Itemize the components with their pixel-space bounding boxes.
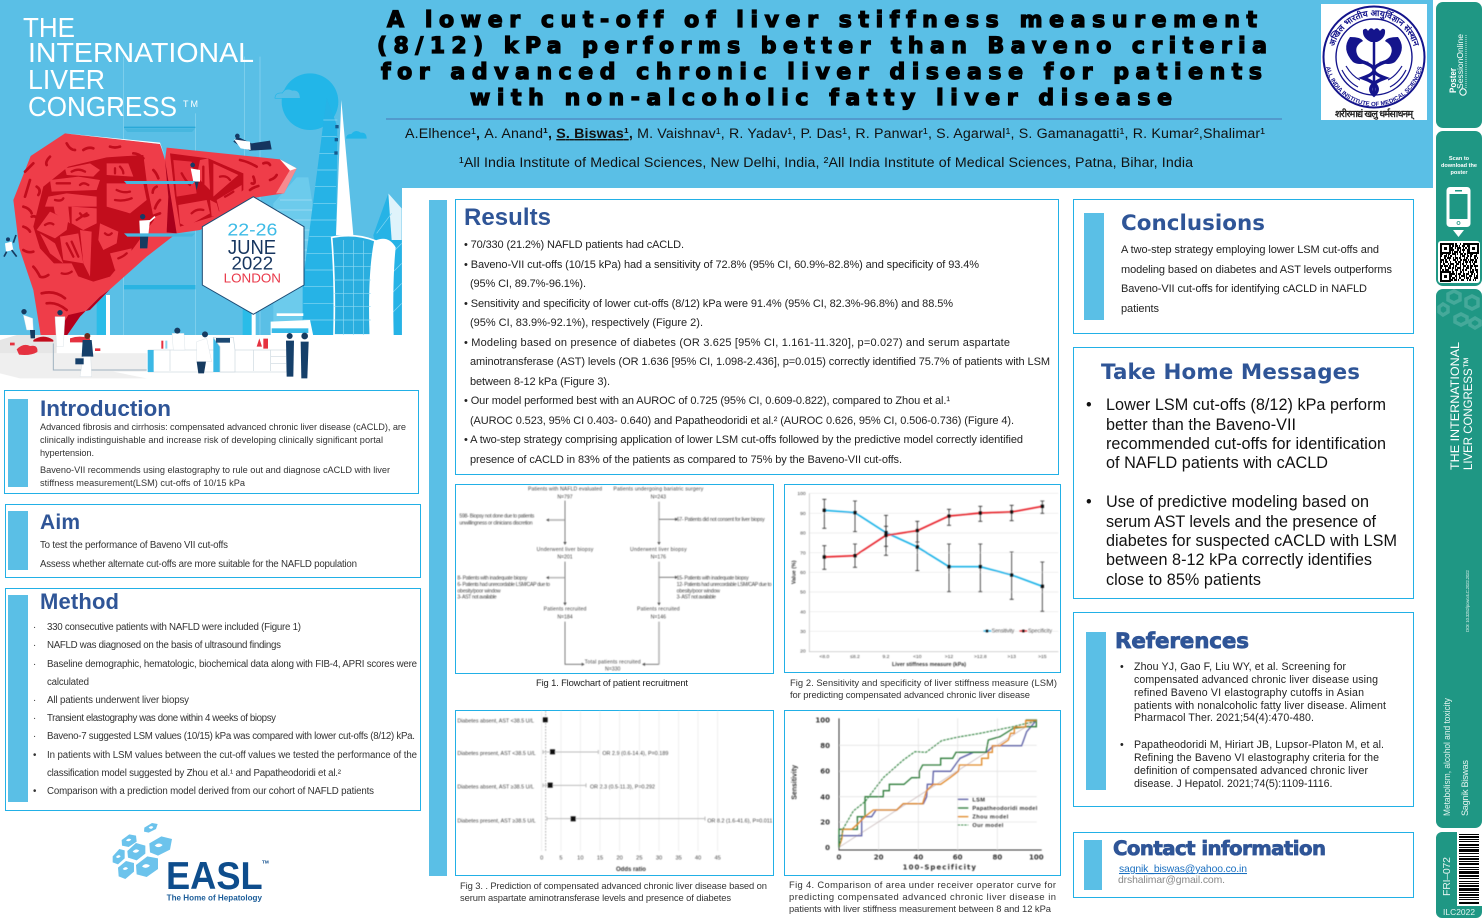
congress code: ILC2022 xyxy=(1443,907,1475,917)
hexagon cluster xyxy=(113,823,172,879)
panel: take home messages xyxy=(1074,348,1414,598)
caption: figure 2: Fig 2. Sensitivity and specificity of liver stiffness measure (LSM) xyxy=(790,677,1057,688)
reference list: definition of compensated advanced chronic liver xyxy=(1134,765,1368,777)
date hexagon: 22-26 xyxy=(227,220,277,240)
reference list: disease. J Hepatol. 2021;74(5):1109-1116. xyxy=(1134,778,1332,790)
line chart: 80 xyxy=(800,531,806,537)
flowchart: N=201 xyxy=(557,555,573,561)
caption: figure 2: for predicting compensated advanced chronic liver disease xyxy=(790,689,1030,700)
accent bar xyxy=(1084,840,1102,890)
forest plot: 10 xyxy=(577,855,583,861)
heading: Results xyxy=(464,204,551,231)
tagline: The Home of Hepatology xyxy=(167,893,262,903)
ROC chart xyxy=(790,717,1044,872)
method list: All patients underwent liver biopsy xyxy=(47,695,189,706)
line chart: 30 xyxy=(800,629,806,635)
date hexagon: JUNE xyxy=(228,236,276,259)
results text: (95% CI, 89.7%-96.1%). xyxy=(470,278,586,290)
date hexagon: 2022 xyxy=(231,252,273,273)
session online logo: Poster xyxy=(1448,68,1458,93)
legend: Sensitivity xyxy=(992,629,1015,635)
forest plot: 5 xyxy=(559,855,563,861)
forest plot: 0 xyxy=(540,855,543,861)
header background xyxy=(0,0,1433,336)
forest plot xyxy=(457,711,772,873)
flowchart: N=184 xyxy=(557,614,573,620)
reference list xyxy=(1120,661,1386,790)
forest plot: 40 xyxy=(695,855,701,861)
results text: • Modeling based on presence of diabetes (OR 3.625 [95% CI, 1.161-11.320], p=0.027) and serum aspartate xyxy=(464,337,1010,349)
panel: figure 4 ROC curve xyxy=(784,710,1060,876)
flowchart: N=243 xyxy=(651,494,666,500)
aim text xyxy=(40,540,357,570)
scientists on liver xyxy=(4,134,272,257)
icon: arrow down xyxy=(1453,230,1464,237)
flowchart: 15- Patients with inadequate biopsy xyxy=(677,576,749,582)
line chart: Value (%) xyxy=(791,560,797,584)
line chart: 40 xyxy=(800,609,806,615)
method list: • xyxy=(33,786,37,797)
heading: Take Home Messages xyxy=(1101,360,1360,385)
flowchart: 3- AST not available xyxy=(457,595,497,601)
presenter: Sagnik Biswas xyxy=(1460,760,1470,816)
line chart: 9.2 xyxy=(883,654,890,660)
accent bar xyxy=(8,511,28,570)
reference list: Papatheodoridi M, Hiriart JB, Lupsor-Platon M, et al. xyxy=(1134,739,1384,751)
reference list: Refining the Baveno VI elastography criteria for the xyxy=(1134,752,1379,764)
caption: figure 1: Fig 1. Flowchart of patient recruitment xyxy=(536,677,688,688)
method list: calculated xyxy=(47,677,89,688)
icon: AIIMS logo: ALL INDIA INSTITUTE OF MEDICAL SCIENCES xyxy=(1326,66,1422,106)
sidebar: poster number and barcode xyxy=(1436,832,1482,918)
reference list: patients with nonalcoholic fatty liver disease. Aliment xyxy=(1134,700,1386,712)
flowchart: Patients recruited xyxy=(544,607,586,613)
scan label xyxy=(1441,156,1477,176)
laboratory xyxy=(148,328,287,373)
forest plot: 15 xyxy=(597,855,603,861)
icon: AIIMS logo xyxy=(1321,4,1427,120)
QR code xyxy=(1438,241,1480,283)
ROC chart: 60 xyxy=(953,853,963,861)
scan label: poster xyxy=(1450,170,1468,176)
heading: References xyxy=(1115,629,1249,654)
method list: · xyxy=(33,731,36,742)
aim text: Assess whether alternate cut-offs are more suitable for the NAFLD population xyxy=(40,559,357,570)
heading: Contact information xyxy=(1113,837,1326,860)
flowchart: Patients undergoing bariatric surgery xyxy=(613,487,704,493)
messages: serum AST levels and the presence of xyxy=(1106,513,1376,531)
line chart: >15 xyxy=(1038,654,1047,660)
flowchart: unwillingness or clinicians discretion xyxy=(459,520,533,526)
poster title xyxy=(377,8,1267,111)
results text: (95% CI, 83.9%-92.1%), respectively (Figure 2). xyxy=(470,317,703,329)
panel: references xyxy=(1074,612,1414,806)
results text xyxy=(464,239,1050,466)
platforms front xyxy=(124,181,195,237)
barcode xyxy=(1457,832,1482,906)
heading: Method xyxy=(40,589,119,614)
EASL wordmark: EASL xyxy=(166,854,263,898)
accent bar xyxy=(8,399,28,487)
method list: · xyxy=(33,640,36,651)
congress illustration xyxy=(0,57,402,385)
congress name xyxy=(23,12,254,122)
flowchart: 598- Biopsy not done due to patients xyxy=(459,514,535,520)
panel: figure 3 forest plot xyxy=(456,710,774,876)
method list: · xyxy=(33,622,36,633)
reference list: • xyxy=(1120,661,1124,673)
session online logo xyxy=(1448,34,1466,95)
email addresses xyxy=(1118,864,1247,886)
line chart: 90 xyxy=(800,511,806,517)
reference list: • xyxy=(1120,739,1124,751)
ROC chart: 80 xyxy=(992,853,1002,861)
poster title: with non-alcoholic fatty liver disease xyxy=(470,86,1172,111)
results text: • Our model performed best with an AUROC of 0.725 (95% CI, 0.609-0.822), compared to Zhou et al.¹ xyxy=(464,395,950,407)
flowchart: N=797 xyxy=(557,494,573,500)
introduction text: hypertension. xyxy=(40,448,94,458)
caption: figure 3: Fig 3. . Prediction of compensated advanced chronic liver disease based on xyxy=(460,880,767,891)
scan label: download the xyxy=(1441,163,1477,169)
honeycomb decoration xyxy=(1439,291,1480,328)
results text: • 70/330 (21.2%) NAFLD patients had cACLD. xyxy=(464,239,684,251)
line chart: 60 xyxy=(800,570,806,576)
flowchart: Patients recruited xyxy=(637,607,680,613)
messages: Lower LSM cut-offs (8/12) kPa perform xyxy=(1106,396,1386,414)
ROC chart: 60 xyxy=(820,768,830,776)
line chart: <8.0 xyxy=(819,654,829,660)
results text: presence of cACLD in 83% of the patients as compared to 75% by the Baveno-VII cut-offs. xyxy=(470,454,902,466)
ground xyxy=(0,335,402,385)
messages xyxy=(1086,396,1397,589)
reference list: Pharmacol Ther. 2021;54(4):470-480. xyxy=(1134,712,1314,724)
method list: · xyxy=(33,713,36,724)
legend: Specificity xyxy=(1028,629,1052,635)
method list: Transient elastography was done within 4 weeks of biopsy xyxy=(47,713,276,724)
accent bar xyxy=(8,595,28,802)
panel: aim xyxy=(6,504,420,578)
forest plot: Diabetes absent, AST ≥38.5 U/L xyxy=(457,785,534,791)
method list: Baseline demographic, hematologic, biochemical data along with FIB-4, APRI scores were xyxy=(47,659,417,670)
accent bar xyxy=(1084,213,1104,320)
introduction text: clinically indistinguishable and increase risk of developing clinically significant portal xyxy=(40,435,383,445)
liver xyxy=(13,133,297,341)
ROC chart: 20 xyxy=(820,819,830,827)
ROC chart: 0 xyxy=(825,844,830,852)
flowchart xyxy=(457,487,772,673)
legend: Our model xyxy=(972,823,1004,829)
affiliations: ¹All India Institute of Medical Sciences, New Delhi, India, ²All India Institute of Medical Sciences, Patna, Bihar, India xyxy=(459,155,1193,171)
flowchart: N=176 xyxy=(651,555,666,561)
messages: of NAFLD patients with cACLD xyxy=(1106,454,1328,472)
congress name vertical: LIVER CONGRESS™ xyxy=(1461,357,1475,470)
method list: Baveno-7 suggested LSM values (10/15) kPa was compared with lower cut-offs (8/12) kPa. xyxy=(47,731,415,742)
reference list: Zhou YJ, Gao F, Liu WY, et al. Screening for xyxy=(1134,661,1346,673)
panel: contact information xyxy=(1074,832,1414,898)
ROC chart: 100 xyxy=(1029,853,1044,861)
messages: diabetes for suspected cACLD with LSM xyxy=(1106,532,1397,550)
line chart: 50 xyxy=(800,590,806,596)
line chart: <10 xyxy=(913,654,922,660)
heading: Conclusions xyxy=(1121,211,1265,236)
DOI: DOI: 10.3252/pcwo.ILC.2022.2022 xyxy=(1465,570,1470,632)
sun and clouds xyxy=(275,73,367,139)
forest plot: OR 2.3 (0.5-11.3), P=0.292 xyxy=(590,785,655,791)
results text: • Baveno-VII cut-offs (10/15 kPa) had a sensitivity of 72.8% (95% CI, 60.9%-82.8%) and specificity of 93.4% xyxy=(464,259,979,271)
method list: Comparison with a prediction model derived from our cohort of NAFLD patients xyxy=(47,786,374,797)
ROC chart: 40 xyxy=(913,853,923,861)
caption: figure 3: serum aspartate aminotransferase levels and presence of diabetes xyxy=(460,892,731,903)
caption: figure 4 xyxy=(789,879,1056,914)
ROC chart: 80 xyxy=(820,742,830,750)
method list: · xyxy=(33,659,36,670)
flowchart: obesity/poor window xyxy=(677,588,720,594)
congress name: LIVER xyxy=(28,64,105,95)
poster title: A lower cut-off of liver stiffness measurement xyxy=(387,8,1257,33)
line chart xyxy=(791,491,1058,668)
flowchart: 67- Patients did not consent for liver biopsy xyxy=(677,517,765,523)
icon: AIIMS logo: अखिल भारतीय आयुर्विज्ञान संस्थान xyxy=(1330,10,1419,46)
email addresses: sagnik_biswas@yahoo.co.in xyxy=(1119,864,1247,875)
line chart: 100 xyxy=(797,491,806,497)
legend: LSM xyxy=(972,797,985,803)
sidebar: congress details xyxy=(1436,289,1482,828)
flowchart: Underwent liver biopsy xyxy=(537,547,594,553)
poster number: FRI–072 xyxy=(1441,857,1453,896)
conclusions text: Baveno-VII cut-offs for identifying cACLD in NAFLD xyxy=(1121,283,1367,295)
flowchart: Underwent liver biopsy xyxy=(630,547,687,553)
heading: Aim xyxy=(40,511,80,534)
legend: Zhou model xyxy=(972,814,1009,820)
london skyline xyxy=(273,97,402,335)
messages: close to 85% patients xyxy=(1106,571,1261,589)
conclusions text: modeling based on diabetes and AST levels outperforms xyxy=(1121,264,1392,276)
messages: better than the Baveno-VII xyxy=(1106,416,1296,434)
congress name: INTERNATIONAL xyxy=(28,37,254,68)
congress name: TM xyxy=(183,99,198,109)
caption: figure 4: predicting compensated advanced chronic liver disease in xyxy=(789,891,1056,902)
caption: figure 3 xyxy=(460,880,767,903)
introduction text: Baveno-VII recommends using elastography to rule out and diagnose cACLD with liver xyxy=(40,465,390,475)
panel: figure 1 flowchart xyxy=(456,484,774,674)
conclusions text: patients xyxy=(1121,303,1160,315)
ROC chart: 100 xyxy=(815,717,830,725)
messages: between 8-12 kPa correctly identifies xyxy=(1106,551,1372,569)
pillars and platforms xyxy=(97,57,260,342)
congress name: THE xyxy=(23,12,75,43)
flowchart: N=330 xyxy=(605,667,620,673)
results text: • A two-step strategy comprising application of lower LSM cut-offs followed by the predictive model correctly identified xyxy=(464,434,1023,446)
forest plot: OR 8.2 (1.6-41.6), P=0.011 xyxy=(707,818,772,824)
panel: conclusions xyxy=(1074,200,1414,334)
line chart: >13 xyxy=(1007,654,1016,660)
session track: Metabolism, alcohol and toxicity xyxy=(1442,698,1452,816)
email addresses: drshalimar@gmail.com. xyxy=(1118,875,1225,886)
panel: introduction xyxy=(4,390,418,494)
people on ground xyxy=(21,309,309,378)
flowchart: Total patients recruited xyxy=(585,659,641,665)
session online logo: SessionOnline xyxy=(1455,34,1465,89)
sidebar: poster session online xyxy=(1436,2,1482,128)
legend xyxy=(958,797,1038,829)
ROC chart: 40 xyxy=(820,793,830,801)
line chart: >12 xyxy=(945,654,953,660)
aim text: To test the performance of Baveno VII cut-offs xyxy=(40,540,228,551)
reference list: refined Baveno VI elastography cutoffs in Asian xyxy=(1134,687,1364,699)
results text: aminotransferase (AST) levels (OR 1.636 [95% CI, 1.098-2.436], p=0.015) correctly identified 75.7% of patients with LSM xyxy=(470,356,1050,368)
introduction text: Advanced fibrosis and cirrhosis: compensated advanced chronic liver disease (cACLD), are xyxy=(40,422,406,432)
panel: results xyxy=(456,200,1058,474)
method list: NAFLD was diagnosed on the basis of ultrasound findings xyxy=(47,640,281,651)
forest plot: Odds ratio xyxy=(616,867,646,873)
flowchart: N=146 xyxy=(651,614,666,620)
introduction text xyxy=(40,422,406,488)
forest plot: OR 2.9 (0.6-14.4), P=0.189 xyxy=(602,751,668,757)
lobules xyxy=(37,158,242,282)
flowchart: Patients with NAFLD evaluated xyxy=(528,487,602,493)
congress name vertical: THE INTERNATIONAL xyxy=(1448,342,1462,470)
results text: • Sensitivity and specificity of lower cut-offs (8/12) kPa were 91.4% (95% CI, 82.3%-96.8%) and 88.5% xyxy=(464,298,953,310)
messages: recommended cut-offs for identification xyxy=(1106,435,1386,453)
caption: figure 4: Fig 4. Comparison of area under receiver operator curve for xyxy=(789,879,1056,890)
messages: • xyxy=(1086,396,1092,414)
forest plot: Diabetes present, AST ≥38.5 U/L xyxy=(457,818,536,824)
poster title: for advanced chronic liver disease for patients xyxy=(381,60,1262,85)
results text: (AUROC 0.523, 95% CI 0.403- 0.640) and Papatheodoridi et al.² (AUROC 0.626, 95% CI, 0.506-0.736) (Figure 4). xyxy=(470,415,1014,427)
line chart: ≤8.2 xyxy=(850,654,860,660)
legend: Papatheodoridi model xyxy=(972,806,1038,812)
ROC chart: 20 xyxy=(874,853,884,861)
ROC chart: Sensitivity xyxy=(790,764,799,800)
line chart: 70 xyxy=(800,550,806,556)
introduction text: stiffness measurement(LSM) cut-offs of 10/15 kPa xyxy=(40,478,246,488)
method list: 330 consecutive patients with NAFLD were included (Figure 1) xyxy=(47,622,301,633)
lobule detail squiggles xyxy=(45,167,233,274)
caption: figure 2 xyxy=(790,677,1057,700)
method list: In patients with LSM values between the cut-off values we tested the performance of the xyxy=(47,750,417,761)
forest plot: 25 xyxy=(636,855,642,861)
line chart: >12.8 xyxy=(974,654,987,660)
scan label: Scan to xyxy=(1449,156,1470,162)
icon: EASL logo xyxy=(113,823,269,903)
forest plot: Diabetes present, AST <38.5 U/L xyxy=(457,751,536,757)
flowchart: 8- Patients with inadequate biopsy xyxy=(457,576,528,582)
messages: • xyxy=(1086,493,1092,511)
date hexagon xyxy=(202,197,304,314)
forest plot: 20 xyxy=(617,855,623,861)
bus xyxy=(271,313,313,336)
panel: method xyxy=(6,588,420,810)
conclusions text xyxy=(1121,244,1392,315)
panel: figure 2 line chart xyxy=(784,484,1060,672)
icon: AIIMS logo: शरीरमाद्यं खलु धर्मसाधनम् xyxy=(1335,108,1415,120)
reference list: compensated advanced chronic liver disease using xyxy=(1134,674,1378,686)
method list: · xyxy=(33,695,36,706)
forest plot: 45 xyxy=(715,855,721,861)
flowchart: 12- Patients had unrecordable LSM/CAP due to xyxy=(677,582,772,588)
flowchart: 6- Patients had unrecordable LSM/CAP due to xyxy=(457,582,550,588)
heading: Introduction xyxy=(40,396,171,421)
poster title: (8/12) kPa performs better than Baveno criteria xyxy=(377,34,1267,59)
conclusions text: A two-step strategy employing lower LSM cut-offs and xyxy=(1121,244,1379,256)
results accent bar xyxy=(429,200,447,876)
congress name: CONGRESS xyxy=(28,91,177,122)
line chart: 20 xyxy=(800,649,806,655)
forest plot: Diabetes absent, AST <38.5 U/L xyxy=(457,719,534,725)
line chart: Liver stiffness measure (kPa) xyxy=(892,662,966,668)
authors: A.Elhence¹, A. Anand¹, S. Biswas¹, M. Vaishnav¹, R. Yadav¹, P. Das¹, R. Panwar¹, S. Agarwal¹, S. Gamanagatti¹, R. Kumar²,Shalimar¹ xyxy=(405,126,1265,142)
results text: between 8-12 kPa (Figure 3). xyxy=(470,376,610,388)
congress name vertical xyxy=(1448,342,1475,470)
messages: Use of predictive modeling based on xyxy=(1106,493,1369,511)
forest plot: 30 xyxy=(656,855,662,861)
ROC chart: 0 xyxy=(837,853,842,861)
sidebar: scan to download xyxy=(1436,131,1482,286)
legend xyxy=(983,629,1052,635)
method list xyxy=(33,622,417,797)
forest plot: 35 xyxy=(676,855,682,861)
method list: classification model suggested by Zhou et al.¹ and Papatheodoridi et al.² xyxy=(47,768,342,779)
icon: EASL logo: TM xyxy=(262,860,269,865)
accent bar xyxy=(1086,632,1106,790)
icon: phone xyxy=(1446,187,1470,227)
date hexagon: LONDON xyxy=(224,271,281,286)
flowchart: obesity/poor window xyxy=(457,588,501,594)
caption: figure 4: patients with liver stiffness measurement between 8 and 12 kPa xyxy=(789,903,1052,914)
flowchart: 3- AST not available xyxy=(677,595,716,601)
ROC chart: 100-Specificity xyxy=(903,864,976,872)
method list: • xyxy=(33,750,37,761)
